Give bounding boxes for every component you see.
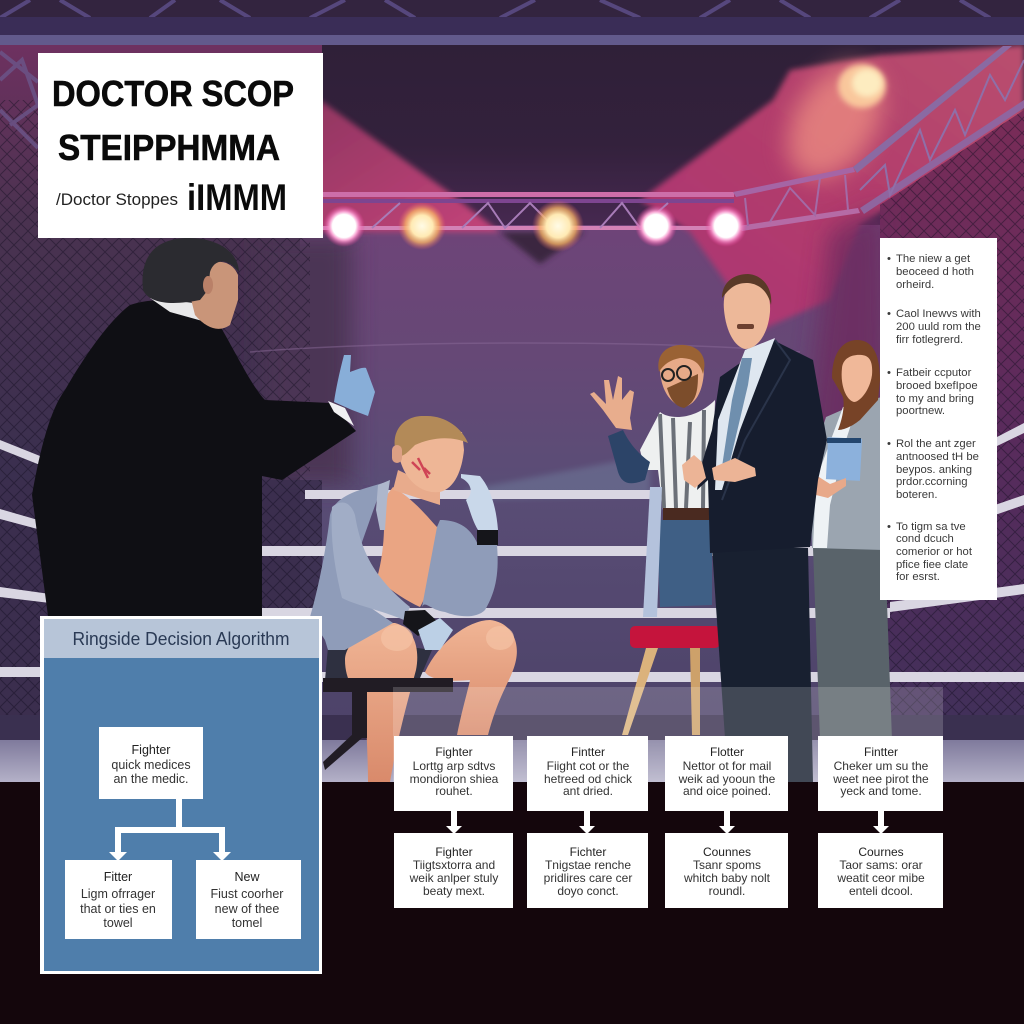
- flow box: left: that or ties en: [80, 902, 156, 916]
- flow box: right: New: [234, 870, 260, 884]
- flow column 3: Counnes: [703, 845, 751, 859]
- flow column 2: [527, 736, 648, 908]
- flow column 4: weatit ceor mibe: [836, 871, 925, 885]
- flow box: right: [196, 860, 301, 939]
- stool: [622, 626, 720, 735]
- flow column 3: whitch baby nolt: [683, 871, 771, 885]
- panel: bullet notes: cond dcuch: [896, 533, 954, 545]
- stage lights: [323, 200, 747, 252]
- panel: bullet notes: brooed bxefIpoe: [896, 380, 978, 392]
- flow box: top: [99, 727, 203, 799]
- flow column 2: Fichter: [570, 845, 606, 859]
- panel: bullet notes: to my and bring: [896, 393, 974, 405]
- side truss, upper left: [0, 52, 38, 148]
- panel: bullet notes: •: [887, 521, 891, 533]
- flow box: left: Ligm ofrrager: [81, 887, 155, 901]
- panel: bullet notes: Fatbeir ccputor: [896, 367, 972, 379]
- panel: bullet notes: boteren.: [896, 489, 937, 501]
- panel: bullet notes: pfice fiee clate: [896, 559, 968, 571]
- title block: [38, 53, 323, 238]
- panel: bullet notes: beypos. anking: [896, 464, 972, 476]
- flow box: right: tomel: [232, 916, 262, 930]
- panel: bullet notes: prdor.ccorning: [896, 476, 968, 488]
- spotlight glow, upper right: [768, 48, 902, 196]
- flow column 3: and oice poined.: [683, 784, 771, 798]
- panel: bullet notes: [880, 238, 997, 600]
- flow box: right: new of thee: [215, 902, 279, 916]
- flow column 2: hetreed od chick: [544, 772, 633, 786]
- flow box: left: towel: [103, 916, 133, 930]
- flow column 4: [818, 736, 943, 908]
- flow column 3: Nettor ot for mail: [683, 759, 771, 773]
- ring floor: [0, 740, 1024, 782]
- flow column 3: weik ad yooun the: [678, 772, 776, 786]
- flow column 1: rouhet.: [435, 784, 473, 798]
- panel: bullet notes: antnoosed tH be: [896, 451, 979, 463]
- panel: ringside decision algorithm: [40, 616, 322, 974]
- translucent flow backdrop: [393, 687, 943, 782]
- title block: STEIPPHMMA: [58, 127, 280, 168]
- lighting truss: [322, 46, 1024, 231]
- flow box: top: quick medices: [111, 758, 191, 772]
- seated fighter: [310, 416, 517, 782]
- panel: bullet notes: The niew a get: [896, 253, 971, 265]
- panel: bullet notes: orheird.: [896, 279, 934, 291]
- flow column 4: Cheker um su the: [834, 759, 929, 773]
- flow column 2: Fiight cot or the: [547, 759, 630, 773]
- flow column 4: Fintter: [864, 745, 898, 759]
- flow column 1: beaty mext.: [423, 884, 485, 898]
- flow column 4: weet nee pirot the: [832, 772, 929, 786]
- flow column 1: Fighter: [435, 745, 473, 759]
- flow column 4: Taor sams: orar: [839, 858, 923, 872]
- official in dark suit: [682, 274, 827, 782]
- title block: /Doctor Stoppes: [56, 190, 178, 209]
- flow connector arrows: [109, 799, 231, 861]
- flow column 2: pridlires care cer: [544, 871, 632, 885]
- flow column 3: [665, 736, 788, 908]
- panel heading: Ringside Decision Algorithm: [72, 629, 290, 649]
- flow box: right: Fiust coorher: [211, 887, 283, 901]
- panel: bullet notes: beoceed d hoth: [896, 266, 974, 278]
- panel: bullet notes: Rol the ant zger: [896, 438, 976, 450]
- overhead truss: [0, 0, 1024, 45]
- panel: bullet notes: •: [887, 438, 891, 450]
- flow column 4: enteli dcool.: [849, 884, 913, 898]
- panel: bullet notes: •: [887, 367, 891, 379]
- panel: bullet notes: •: [887, 253, 891, 265]
- corner post: [643, 487, 662, 617]
- title block: DOCTOR SCOP: [52, 73, 294, 114]
- dark lower stage: [0, 782, 1024, 1024]
- arena background: [0, 0, 1024, 782]
- flow box: left: [65, 860, 172, 939]
- bench: [323, 678, 453, 770]
- flow column 3: roundl.: [709, 884, 745, 898]
- doctor in black suit: [32, 238, 375, 616]
- flow column 2: Tnigstae renche: [545, 858, 631, 872]
- flow column 2: ant dried.: [563, 784, 613, 798]
- flow column 2: Fintter: [571, 745, 605, 759]
- flow box: top: an the medic.: [113, 772, 189, 786]
- flow column 2: doyo conct.: [557, 884, 619, 898]
- flow column 1: mondioron shiea: [410, 772, 499, 786]
- flow column 1: Tiigtsxtorra and: [413, 858, 495, 872]
- panel: bullet notes: comerior or hot: [896, 546, 973, 558]
- panel: bullet notes: poortnew.: [896, 405, 945, 417]
- flow column 3: Flotter: [710, 745, 744, 759]
- panel: bullet notes: Caol Inewvs with: [896, 308, 981, 320]
- flow column 4: yeck and tome.: [840, 784, 922, 798]
- flow box: left: Fitter: [104, 870, 132, 884]
- panel: bullet notes: 200 uuld rom the: [896, 321, 981, 333]
- panel: bullet notes: firr fotlegrerd.: [896, 334, 963, 346]
- flow column 1: Lorttg arp sdtvs: [413, 759, 495, 773]
- flow column 1: [394, 736, 513, 908]
- title block: iIMMM: [187, 177, 287, 218]
- panel: bullet notes: To tigm sa tve: [896, 521, 966, 533]
- panel: bullet notes: •: [887, 308, 891, 320]
- flow column 4: Cournes: [858, 845, 904, 859]
- flow column 3: Tsanr spoms: [693, 858, 761, 872]
- flow column 1: weik anlper stuly: [409, 871, 498, 885]
- referee: [590, 345, 715, 607]
- ring ropes: [0, 423, 1024, 682]
- woman with clipboard: [808, 340, 892, 740]
- panel: bullet notes: for esrst.: [896, 571, 940, 583]
- flow box: top: Fighter: [132, 743, 170, 757]
- flow column 1: Fighter: [435, 845, 473, 859]
